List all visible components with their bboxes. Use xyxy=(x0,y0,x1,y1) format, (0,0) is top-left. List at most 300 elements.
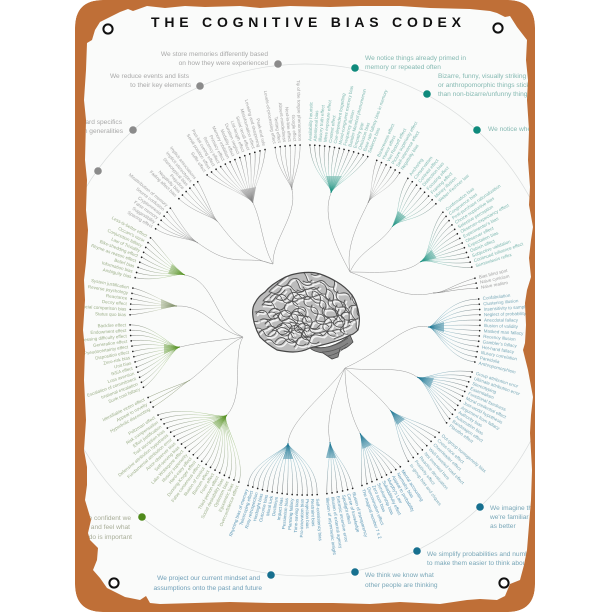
hub xyxy=(283,443,293,459)
outer ring xyxy=(49,64,561,576)
fan: preserving autonomy xyxy=(80,278,243,337)
labels: Conjunction fallacy xyxy=(107,228,144,248)
labels: Ostrich effect xyxy=(469,238,496,253)
curves xyxy=(156,209,198,243)
fan: bizarre things stick out xyxy=(349,120,421,272)
labels: Status quo bias xyxy=(95,311,127,317)
trunk xyxy=(177,306,243,337)
labels: Reverse psychology xyxy=(88,284,129,295)
labels: Framing effect xyxy=(430,171,454,195)
fan: details that confirm beliefs xyxy=(350,183,525,272)
labels: Anchoring xyxy=(408,157,424,177)
fan: noticing change xyxy=(350,155,470,272)
labels left: Declinism xyxy=(271,496,279,516)
fan: immediate rewards xyxy=(102,337,243,434)
labels: Illusion of external agency xyxy=(330,496,343,549)
caption: reduce events: We reduce events and lists xyxy=(110,73,190,80)
curves xyxy=(131,288,177,315)
hub xyxy=(392,211,406,227)
fan: what others think xyxy=(324,368,369,556)
labels: Next-in-line effect xyxy=(284,107,292,143)
labels: Negativity bias xyxy=(157,170,182,194)
labels: Defensive attribution hypothesis xyxy=(117,432,170,478)
trunk xyxy=(345,368,390,410)
caption: confidence: can make an impact and feel what xyxy=(30,524,130,531)
labels left: Time-saving bias xyxy=(293,498,300,533)
labels: Focusing effect xyxy=(425,165,450,191)
labels: Confabulation xyxy=(482,293,511,301)
labels: Choice-supportive bias xyxy=(454,195,496,225)
hub xyxy=(417,377,434,388)
labels: Occam's razor xyxy=(117,226,146,243)
labels: Semmelweis reflex xyxy=(475,252,513,268)
labels: Disposition effect xyxy=(95,350,130,361)
labels: Loss aversion xyxy=(107,371,135,384)
labels: Trait ascription bias xyxy=(132,428,166,457)
labels: Baader-Meinhof phenomenon xyxy=(347,88,367,147)
fan: project mindset to past and future xyxy=(228,368,345,542)
curves xyxy=(327,442,352,493)
labels: Selective perception xyxy=(457,204,494,229)
labels: Money illusion xyxy=(433,175,458,199)
caption: confidence: To act, we must be confident we xyxy=(37,515,131,522)
caption: memories: on how they were experienced xyxy=(179,60,268,67)
labels left: Moral luck xyxy=(265,495,274,516)
labels: Pareidolia xyxy=(479,355,501,365)
labels: Naive realism xyxy=(481,280,509,290)
labels left: Outcome bias xyxy=(258,494,269,522)
caption: imagine: We imagine things xyxy=(490,505,545,512)
hub xyxy=(428,322,444,332)
labels: Anthropomorphism xyxy=(478,361,517,375)
labels: Illusion of asymmetric insight xyxy=(325,497,337,556)
mounting holes xyxy=(103,23,509,588)
hub xyxy=(240,187,256,203)
labels: Illusory truth effect xyxy=(317,104,326,142)
caption: reduce events: to their key elements xyxy=(130,82,192,89)
labels: Illusion of control xyxy=(183,466,206,497)
labels: Essentialism xyxy=(470,386,495,400)
labels: Curse of knowledge xyxy=(346,493,361,533)
labels: Negativity bias xyxy=(400,143,420,171)
labels: Recency effect xyxy=(202,136,221,165)
labels xyxy=(359,465,425,540)
trunk xyxy=(227,337,243,415)
labels: Implicit associations xyxy=(169,145,198,181)
trunk xyxy=(185,275,243,337)
curves xyxy=(433,278,476,293)
cerebellum lines xyxy=(315,338,348,356)
labels: Insensitivity to sample size xyxy=(484,304,538,312)
labels: Appeal to novelty xyxy=(115,402,149,423)
trunk xyxy=(345,326,428,368)
labels: Bike-shedding effect xyxy=(99,239,139,258)
labels: Misinformation effect xyxy=(239,108,256,150)
fan: reduced events and lists xyxy=(186,99,273,264)
labels xyxy=(127,172,173,231)
caption: simplify: We simplify probabilities and numbers xyxy=(427,551,539,558)
labels: Risk compensation xyxy=(125,419,160,445)
labels: Memory inhibition xyxy=(211,125,231,160)
caption: project: We project our current mindset and xyxy=(157,575,260,582)
labels: Peak-end rule xyxy=(255,118,267,147)
labels: Attentional bias xyxy=(312,110,319,141)
caption: others: other people are thinking xyxy=(365,582,438,589)
labels: Third-person effect xyxy=(197,474,220,510)
labels: Mere exposure effect xyxy=(323,99,332,142)
trunk xyxy=(198,243,273,264)
labels left xyxy=(228,484,305,538)
curves xyxy=(248,443,317,494)
labels: Group attribution error xyxy=(475,371,519,389)
hub xyxy=(326,176,342,193)
labels: Weber-Fechner law xyxy=(437,173,470,203)
labels: Stereotypical bias xyxy=(162,157,190,187)
hub xyxy=(161,299,177,309)
labels left: Pro-innovation bias xyxy=(299,498,305,538)
curves xyxy=(310,146,367,193)
labels: Zero-risk bias xyxy=(103,355,131,366)
labels: Continued influence effect xyxy=(473,241,525,263)
caption: imagine: as better xyxy=(490,523,516,530)
labels: Illusory correlation xyxy=(481,350,518,362)
labels: Reactive devaluation xyxy=(418,455,449,491)
labels: Duration neglect xyxy=(224,123,241,155)
labels: Egocentric bias xyxy=(218,482,235,513)
labels: Endowment effect xyxy=(90,328,127,335)
outer markers: meaning xyxy=(267,503,484,579)
title: THE COGNITIVE BIAS CODEX xyxy=(151,14,462,30)
labels: Effort justification xyxy=(132,424,163,449)
labels: Appeal to probability xyxy=(391,475,416,513)
labels: In-group bias and cliques xyxy=(409,463,443,507)
trunk xyxy=(180,337,243,347)
trunk xyxy=(350,262,420,272)
labels: Part-list cueing effect xyxy=(191,128,217,168)
curves xyxy=(428,299,479,362)
labels xyxy=(263,80,303,149)
labels: Authority bias xyxy=(457,410,484,428)
labels left: Planning fallacy xyxy=(287,498,294,530)
trunk xyxy=(350,227,392,272)
labels right: Self-consistency bias xyxy=(315,498,323,542)
labels left: Impact bias xyxy=(276,496,284,521)
labels: Lake Wobegone effect xyxy=(150,448,185,485)
caption: simplify: to make them easier to think about xyxy=(427,560,528,567)
labels: Out-group homogeneity bias xyxy=(441,433,488,474)
labels: Leveling and sharpening xyxy=(244,99,261,148)
caption: imagine: we're familiar with xyxy=(489,514,543,521)
labels: Normalcy bias xyxy=(396,472,415,499)
labels: Cheerleader effect xyxy=(432,442,463,472)
labels: Automation bias xyxy=(454,414,485,436)
caption: confidence: we do is important xyxy=(77,534,132,541)
trunk xyxy=(288,368,345,443)
labels: Suffix effect xyxy=(190,151,207,174)
labels xyxy=(374,120,421,175)
labels: Social desirability bias xyxy=(200,477,225,519)
labels: Spotlight effect xyxy=(341,494,352,525)
labels: Serial recall effect xyxy=(235,115,251,152)
labels: Placebo effect xyxy=(448,423,475,444)
labels: Levels-of-processing effect xyxy=(263,90,277,145)
labels: Illusion of transparency xyxy=(351,492,369,538)
fan: things primed in memory xyxy=(307,85,389,272)
labels: Subadditivity effect xyxy=(381,480,403,517)
labels: Observer effect xyxy=(465,225,495,243)
trunk xyxy=(273,190,293,264)
labels: Primacy effect xyxy=(208,134,226,162)
hub xyxy=(164,344,180,354)
trunk xyxy=(345,368,360,433)
labels: Identifiable victim effect xyxy=(102,397,146,422)
labels xyxy=(102,395,155,434)
fan: generalities xyxy=(149,145,273,264)
caption: primed: We notice things already primed in xyxy=(365,55,466,62)
labels: Post-purchase rationalization xyxy=(451,183,502,220)
labels xyxy=(324,487,369,556)
labels: Spacing effect xyxy=(127,210,154,229)
trunk xyxy=(349,203,368,272)
labels: Expectation bias xyxy=(467,230,500,248)
curves xyxy=(275,146,300,190)
hub xyxy=(360,433,372,449)
curves xyxy=(131,325,180,387)
labels xyxy=(441,183,525,270)
curves xyxy=(368,161,399,203)
labels xyxy=(473,293,538,375)
labels: Conservatism xyxy=(413,155,434,180)
curves xyxy=(149,380,190,406)
labels: Reactance xyxy=(106,293,128,301)
trunk xyxy=(190,337,243,380)
labels: Decoy effect xyxy=(102,299,128,306)
labels: Hot-hand fallacy xyxy=(482,345,515,355)
caption: primed: memory or repeated often xyxy=(365,64,441,71)
curves xyxy=(360,433,400,484)
labels: Recency illusion xyxy=(483,334,516,342)
outer marker: act xyxy=(138,513,146,521)
labels: Zero sum bias xyxy=(371,484,387,513)
labels: Modality effect xyxy=(219,128,236,158)
labels: Escalation of commitment xyxy=(86,376,137,398)
curves xyxy=(417,371,471,422)
trunk xyxy=(253,203,273,264)
labels: System justification xyxy=(91,278,130,290)
hub xyxy=(390,410,405,425)
fan: simplify probabilities xyxy=(345,368,425,540)
fan: familiar is better xyxy=(345,368,488,507)
labels: List-length effect xyxy=(230,120,246,153)
labels: Sunk cost fallacy xyxy=(108,386,141,404)
labels: Optimism bias xyxy=(213,480,230,508)
labels: Context effect xyxy=(328,114,337,143)
labels: Misattribution of memory xyxy=(128,172,169,208)
hub xyxy=(168,264,185,275)
labels: Base rate fallacy bias in memory xyxy=(362,88,389,152)
labels: Salience bias xyxy=(367,126,381,154)
labels xyxy=(186,99,268,177)
fan: edited memories xyxy=(127,172,273,264)
labels: The magical number 7 ± 2 xyxy=(361,488,383,540)
labels: IKEA effect xyxy=(111,366,134,377)
labels: Humor effect xyxy=(381,134,397,160)
trunk xyxy=(218,222,273,264)
labels: Positivity effect xyxy=(414,459,437,486)
labels: Hyperbolic discounting xyxy=(109,407,151,434)
outer markers: memory xyxy=(94,60,282,175)
caption: generalities: to form generalities xyxy=(67,128,124,135)
curves xyxy=(390,410,438,460)
labels: Functional fixedness xyxy=(467,391,508,412)
trunk xyxy=(350,272,433,295)
labels: Anecdotal fallacy xyxy=(484,318,519,323)
labels: Ultimate attribution error xyxy=(473,376,521,397)
labels xyxy=(444,369,521,444)
fan: stored memories xyxy=(263,80,303,264)
labels: Dunning-Kruger effect xyxy=(166,459,197,497)
labels left: Rhyming bias of memory xyxy=(228,488,249,537)
labels: Gambler's fallacy xyxy=(482,339,518,348)
labels: Social comparison bias xyxy=(80,304,127,312)
cerebrum xyxy=(253,272,359,352)
paper background xyxy=(75,0,535,612)
labels: Bandwagon effect xyxy=(451,419,485,444)
labels: Belief bias xyxy=(114,258,136,269)
labels: Peltzman effect xyxy=(127,415,157,436)
labels xyxy=(75,322,145,404)
labels: Cryptomnesia xyxy=(137,195,163,216)
labels: Information bias xyxy=(101,260,134,274)
labels: Illusion of validity xyxy=(484,323,519,329)
labels: Murphy's Law xyxy=(386,477,404,505)
curves xyxy=(180,182,218,222)
labels: Source confusion xyxy=(135,186,166,212)
labels: Serial-position effect xyxy=(186,133,212,171)
labels: Self-serving bias xyxy=(153,445,181,472)
hub xyxy=(420,250,436,262)
labels: Forer effect xyxy=(199,472,216,495)
labels left: Pessimism bias xyxy=(281,497,289,529)
curves xyxy=(159,411,240,481)
labels: Hard-easy effect xyxy=(168,456,193,485)
labels: Cue-dependent forgetting xyxy=(333,92,346,144)
labels: Actor-observer bias xyxy=(145,441,177,472)
labels: Confirmation bias xyxy=(445,186,476,212)
labels xyxy=(474,268,510,291)
labels: Ambiguity bias xyxy=(102,267,133,279)
labels: Rhyme as reason effect xyxy=(90,243,138,264)
labels: Masked man fallacy xyxy=(484,328,524,336)
labels: Denomination effect xyxy=(366,487,385,526)
labels: Overconfidence effect xyxy=(219,484,240,527)
fan: stereotypes and generalities xyxy=(345,368,521,444)
labels xyxy=(117,412,242,527)
labels xyxy=(406,430,488,507)
labels: Mood-congruent memory bias xyxy=(338,85,354,145)
rust frame with torn paper edge xyxy=(75,0,535,612)
labels: Self-relevance effect xyxy=(395,130,421,168)
icon: brain xyxy=(249,272,361,359)
labels: Google effect xyxy=(291,114,297,142)
labels right xyxy=(305,494,323,542)
labels: Extrinsic incentive error xyxy=(335,495,349,543)
folds xyxy=(249,273,361,349)
labels: Tip of the tongue phenomenon xyxy=(296,80,303,142)
caption: memories: We store memories differently based xyxy=(161,51,268,58)
labels: Omission bias xyxy=(357,121,371,150)
radial diagram xyxy=(49,64,561,576)
labels: Clustering illusion xyxy=(483,298,519,306)
labels: Backfire effect xyxy=(98,322,127,328)
labels: Contrast effect xyxy=(417,157,440,184)
labels: Generation effect xyxy=(93,339,128,348)
cerebellum xyxy=(308,335,353,359)
labels: Not invented here xyxy=(423,451,451,481)
labels: False consensus effect xyxy=(170,462,202,503)
caption: generalities: We discard specifics xyxy=(62,119,123,126)
outer markers: noticing xyxy=(351,64,481,134)
labels xyxy=(80,278,134,317)
caption: bizarre: Bizarre, funny, visually striking xyxy=(438,73,527,80)
labels: Fundamental attribution error xyxy=(126,437,173,479)
labels: Illusory superiority xyxy=(161,452,189,483)
caption: bizarre: than non-bizarre/unfunny things xyxy=(438,91,531,98)
labels xyxy=(307,85,389,158)
brain outline xyxy=(253,272,359,352)
labels: Empathy gap xyxy=(352,121,365,149)
trunk xyxy=(345,368,417,377)
labels: Congruence bias xyxy=(448,191,479,216)
labels: Barnum effect xyxy=(191,469,211,496)
curves xyxy=(208,151,265,203)
trunk xyxy=(328,193,350,272)
caption: others: We think we know what xyxy=(365,572,434,579)
labels: Bias blind spot xyxy=(478,268,509,280)
labels: Law of Triviality xyxy=(111,237,142,253)
labels: Availability heuristic xyxy=(307,101,314,141)
curves xyxy=(136,238,185,279)
labels: Implicit stereotypes xyxy=(165,150,194,184)
labels: Testing effect xyxy=(273,116,282,144)
labels: Von Restorff effect xyxy=(386,127,408,163)
labels right: Projection bias xyxy=(305,499,310,529)
labels: Just-world hypothesis xyxy=(463,400,504,425)
trunk xyxy=(329,368,345,442)
labels: Experimenter's bias xyxy=(462,216,500,239)
labels left: Rosy retrospection xyxy=(244,491,259,529)
labels: Naive cynicism xyxy=(479,274,510,285)
labels: Argument from fallacy xyxy=(460,405,501,431)
fan: confidence to act xyxy=(117,337,243,527)
curves xyxy=(420,213,471,267)
labels xyxy=(149,145,200,201)
labels: Mental accounting xyxy=(400,469,425,503)
hub xyxy=(326,442,336,458)
labels xyxy=(90,215,152,280)
labels: Moral credential effect xyxy=(465,396,508,420)
labels: Absent-mindedness xyxy=(278,102,287,143)
labels left: Telescoping effect xyxy=(238,489,254,526)
labels: Picture superiority effect xyxy=(390,120,419,165)
labels: Suggestibility xyxy=(131,206,157,225)
fan: stories from sparse data xyxy=(345,293,538,375)
caption: project: assumptions onto the past and future xyxy=(153,585,262,592)
labels: Irrational escalation xyxy=(100,381,139,400)
labels: Unit bias xyxy=(114,360,133,369)
labels: Bizarreness effect xyxy=(376,122,396,158)
fan: flaws in others xyxy=(350,268,510,295)
